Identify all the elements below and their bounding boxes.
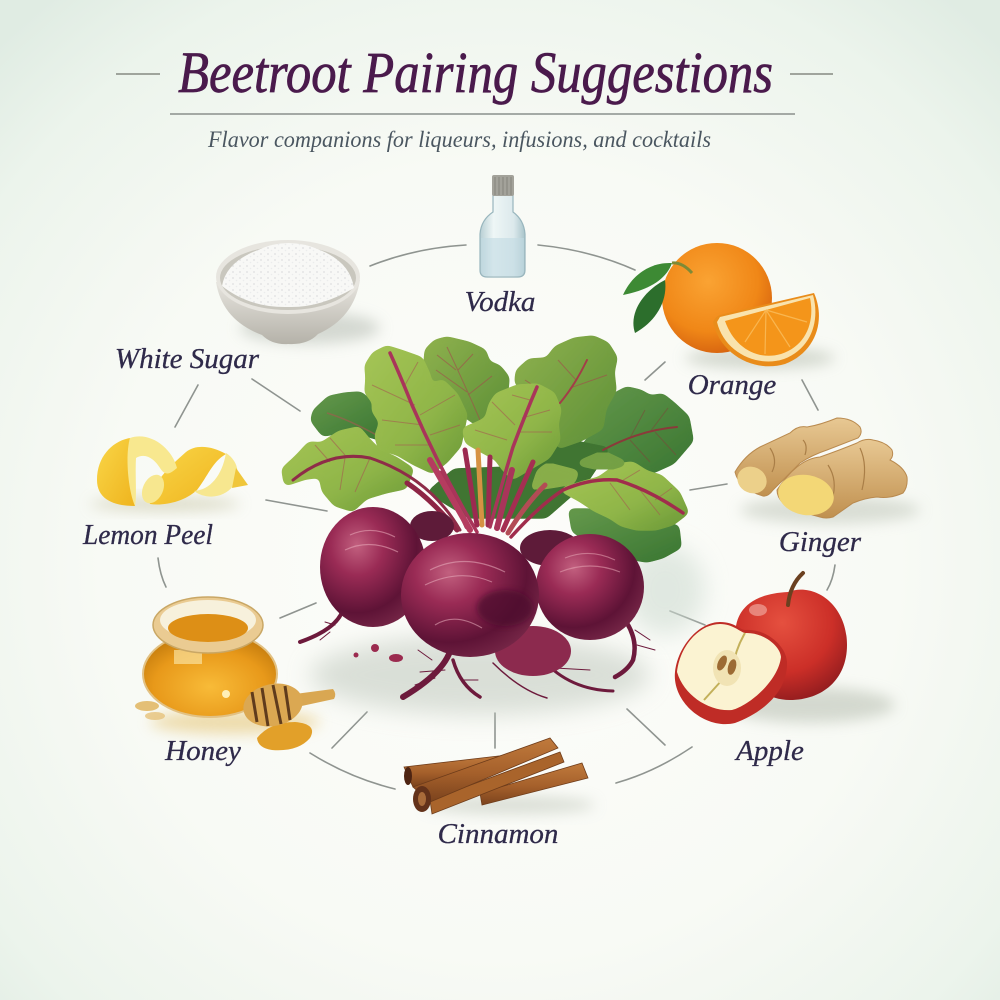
label: White Sugar: White Sugar — [115, 343, 260, 375]
beet roots — [300, 606, 655, 698]
label: Apple: Apple — [734, 735, 804, 767]
orange — [623, 243, 835, 401]
label: Cinnamon: Cinnamon — [438, 818, 558, 850]
label: Vodka: Vodka — [465, 286, 535, 318]
leaf: right dark — [582, 390, 690, 470]
jar body — [143, 631, 277, 717]
leaf: lower right dark — [572, 512, 678, 559]
icon: honey jar with dipper — [135, 597, 335, 750]
leaf: top right — [518, 339, 614, 445]
cut apple — [675, 622, 787, 724]
label: Orange: Orange — [688, 369, 776, 401]
white sugar — [115, 240, 380, 375]
back beet — [495, 626, 571, 676]
subtitle: Flavor companions for liqueurs, infusions, and cocktails — [207, 127, 711, 152]
whole apple — [735, 590, 847, 700]
beet crown behind — [520, 530, 580, 566]
label: Ginger: Ginger — [779, 526, 862, 558]
dipper — [295, 689, 335, 707]
right beet — [536, 534, 644, 640]
icon: vodka bottle — [480, 175, 525, 277]
leaf: small upper right — [582, 454, 622, 468]
front beet — [401, 533, 539, 657]
central beetroot bunch — [285, 339, 705, 715]
lemon peel — [82, 436, 248, 551]
honey — [135, 597, 335, 767]
leaf: small mid right — [535, 466, 575, 487]
icon: orange with slice — [623, 243, 835, 369]
orange leaves — [623, 263, 692, 333]
connector lines — [158, 245, 835, 789]
left beet — [320, 507, 426, 627]
beet stems and leaf veins — [293, 353, 683, 537]
icon: cinnamon sticks — [404, 738, 595, 814]
leaf: top left mid — [427, 340, 506, 422]
leaf: filler behind stems — [432, 440, 605, 515]
honey spill — [257, 722, 312, 750]
icon: apple — [675, 573, 895, 724]
leaf: big left — [368, 349, 464, 470]
orange slice — [713, 293, 819, 366]
label: Lemon Peel: Lemon Peel — [82, 519, 213, 551]
title: Beetroot Pairing Suggestions — [178, 40, 773, 105]
icon: ginger root — [733, 418, 920, 524]
leaf: left dark back — [314, 395, 384, 437]
apple — [675, 573, 895, 767]
ginger — [733, 418, 920, 558]
leaf: right lower — [565, 465, 685, 527]
jar rim — [153, 597, 263, 653]
leaf: centre front — [466, 387, 558, 476]
vodka — [465, 175, 535, 318]
label: Honey: Honey — [164, 735, 241, 767]
icon: lemon peel curl — [90, 436, 248, 511]
icon: sugar bowl — [216, 240, 380, 344]
beet splatter — [354, 644, 403, 662]
leaf: left lower — [285, 430, 410, 508]
beet leaves — [285, 339, 690, 559]
cinnamon — [404, 738, 595, 850]
